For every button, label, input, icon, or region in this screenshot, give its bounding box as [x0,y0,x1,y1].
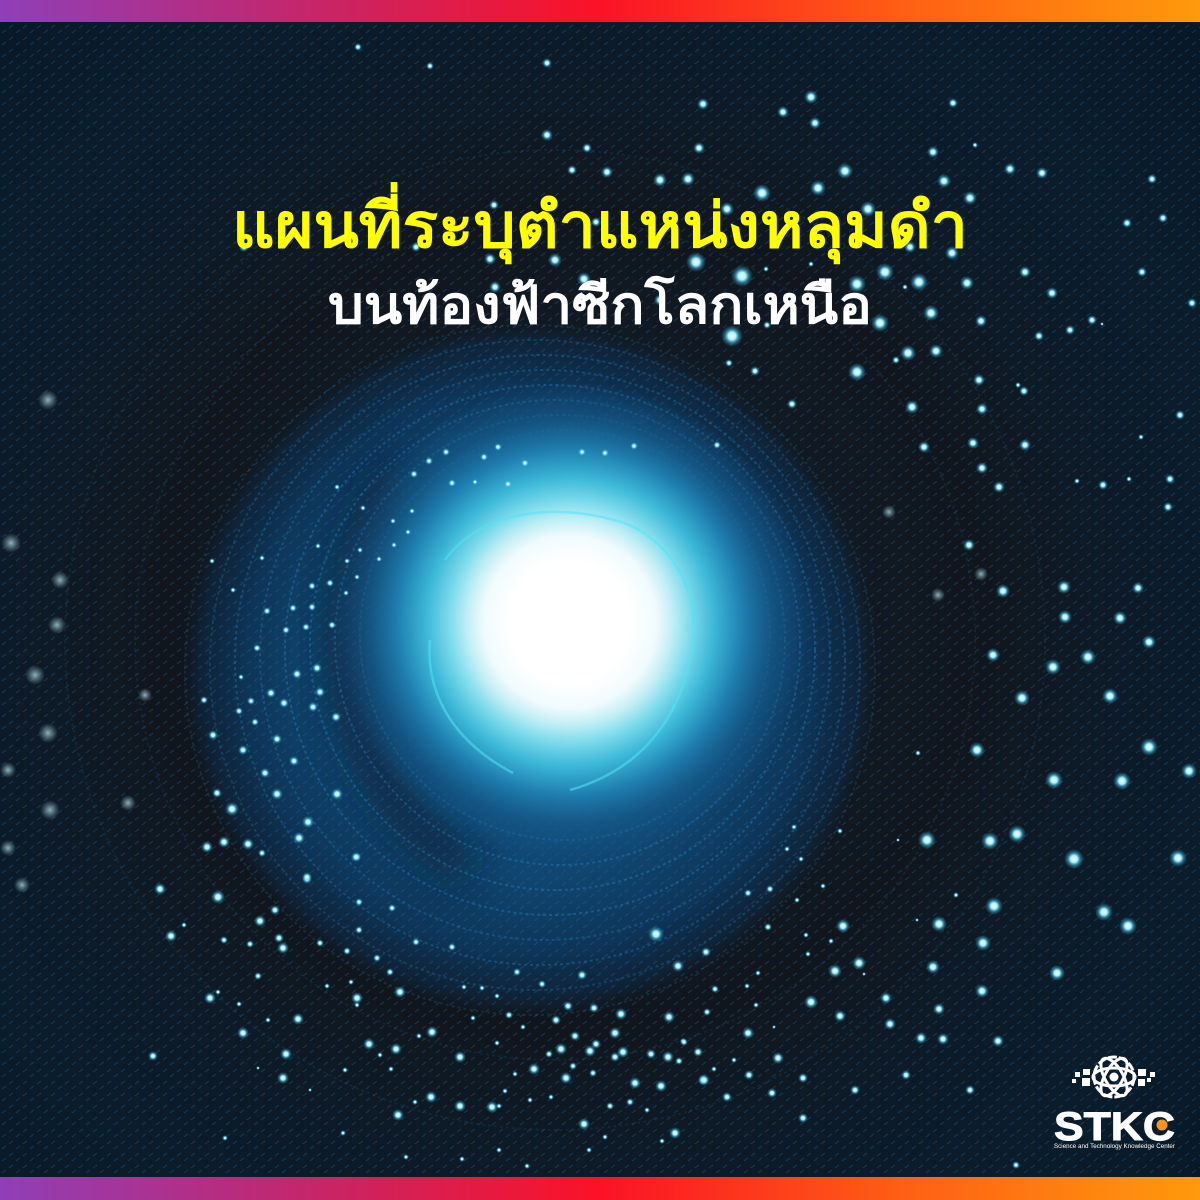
subtitle: บนท้องฟ้าซีกโลกเหนือ [328,274,872,335]
logo wordmark: STKC [1054,1105,1175,1149]
blue vortex disk [185,325,875,1015]
logo: STKC [1054,1054,1175,1150]
swirl highlights around the core [430,512,694,790]
woven vortex rings [65,150,1045,1130]
dark band inside the vortex [348,470,470,870]
blurred distant stars [0,390,988,893]
logo tagline: Science and Technology Knowledge Center [1054,1144,1175,1150]
logo icon: atom [1072,1054,1155,1100]
top gradient bar [0,0,1200,22]
glowing core [330,382,810,862]
logo orange dot [1156,1120,1168,1130]
bottom gradient bar [0,1177,1200,1200]
title: แผนที่ระบุตำแหน่งหลุมดำ [232,182,968,264]
